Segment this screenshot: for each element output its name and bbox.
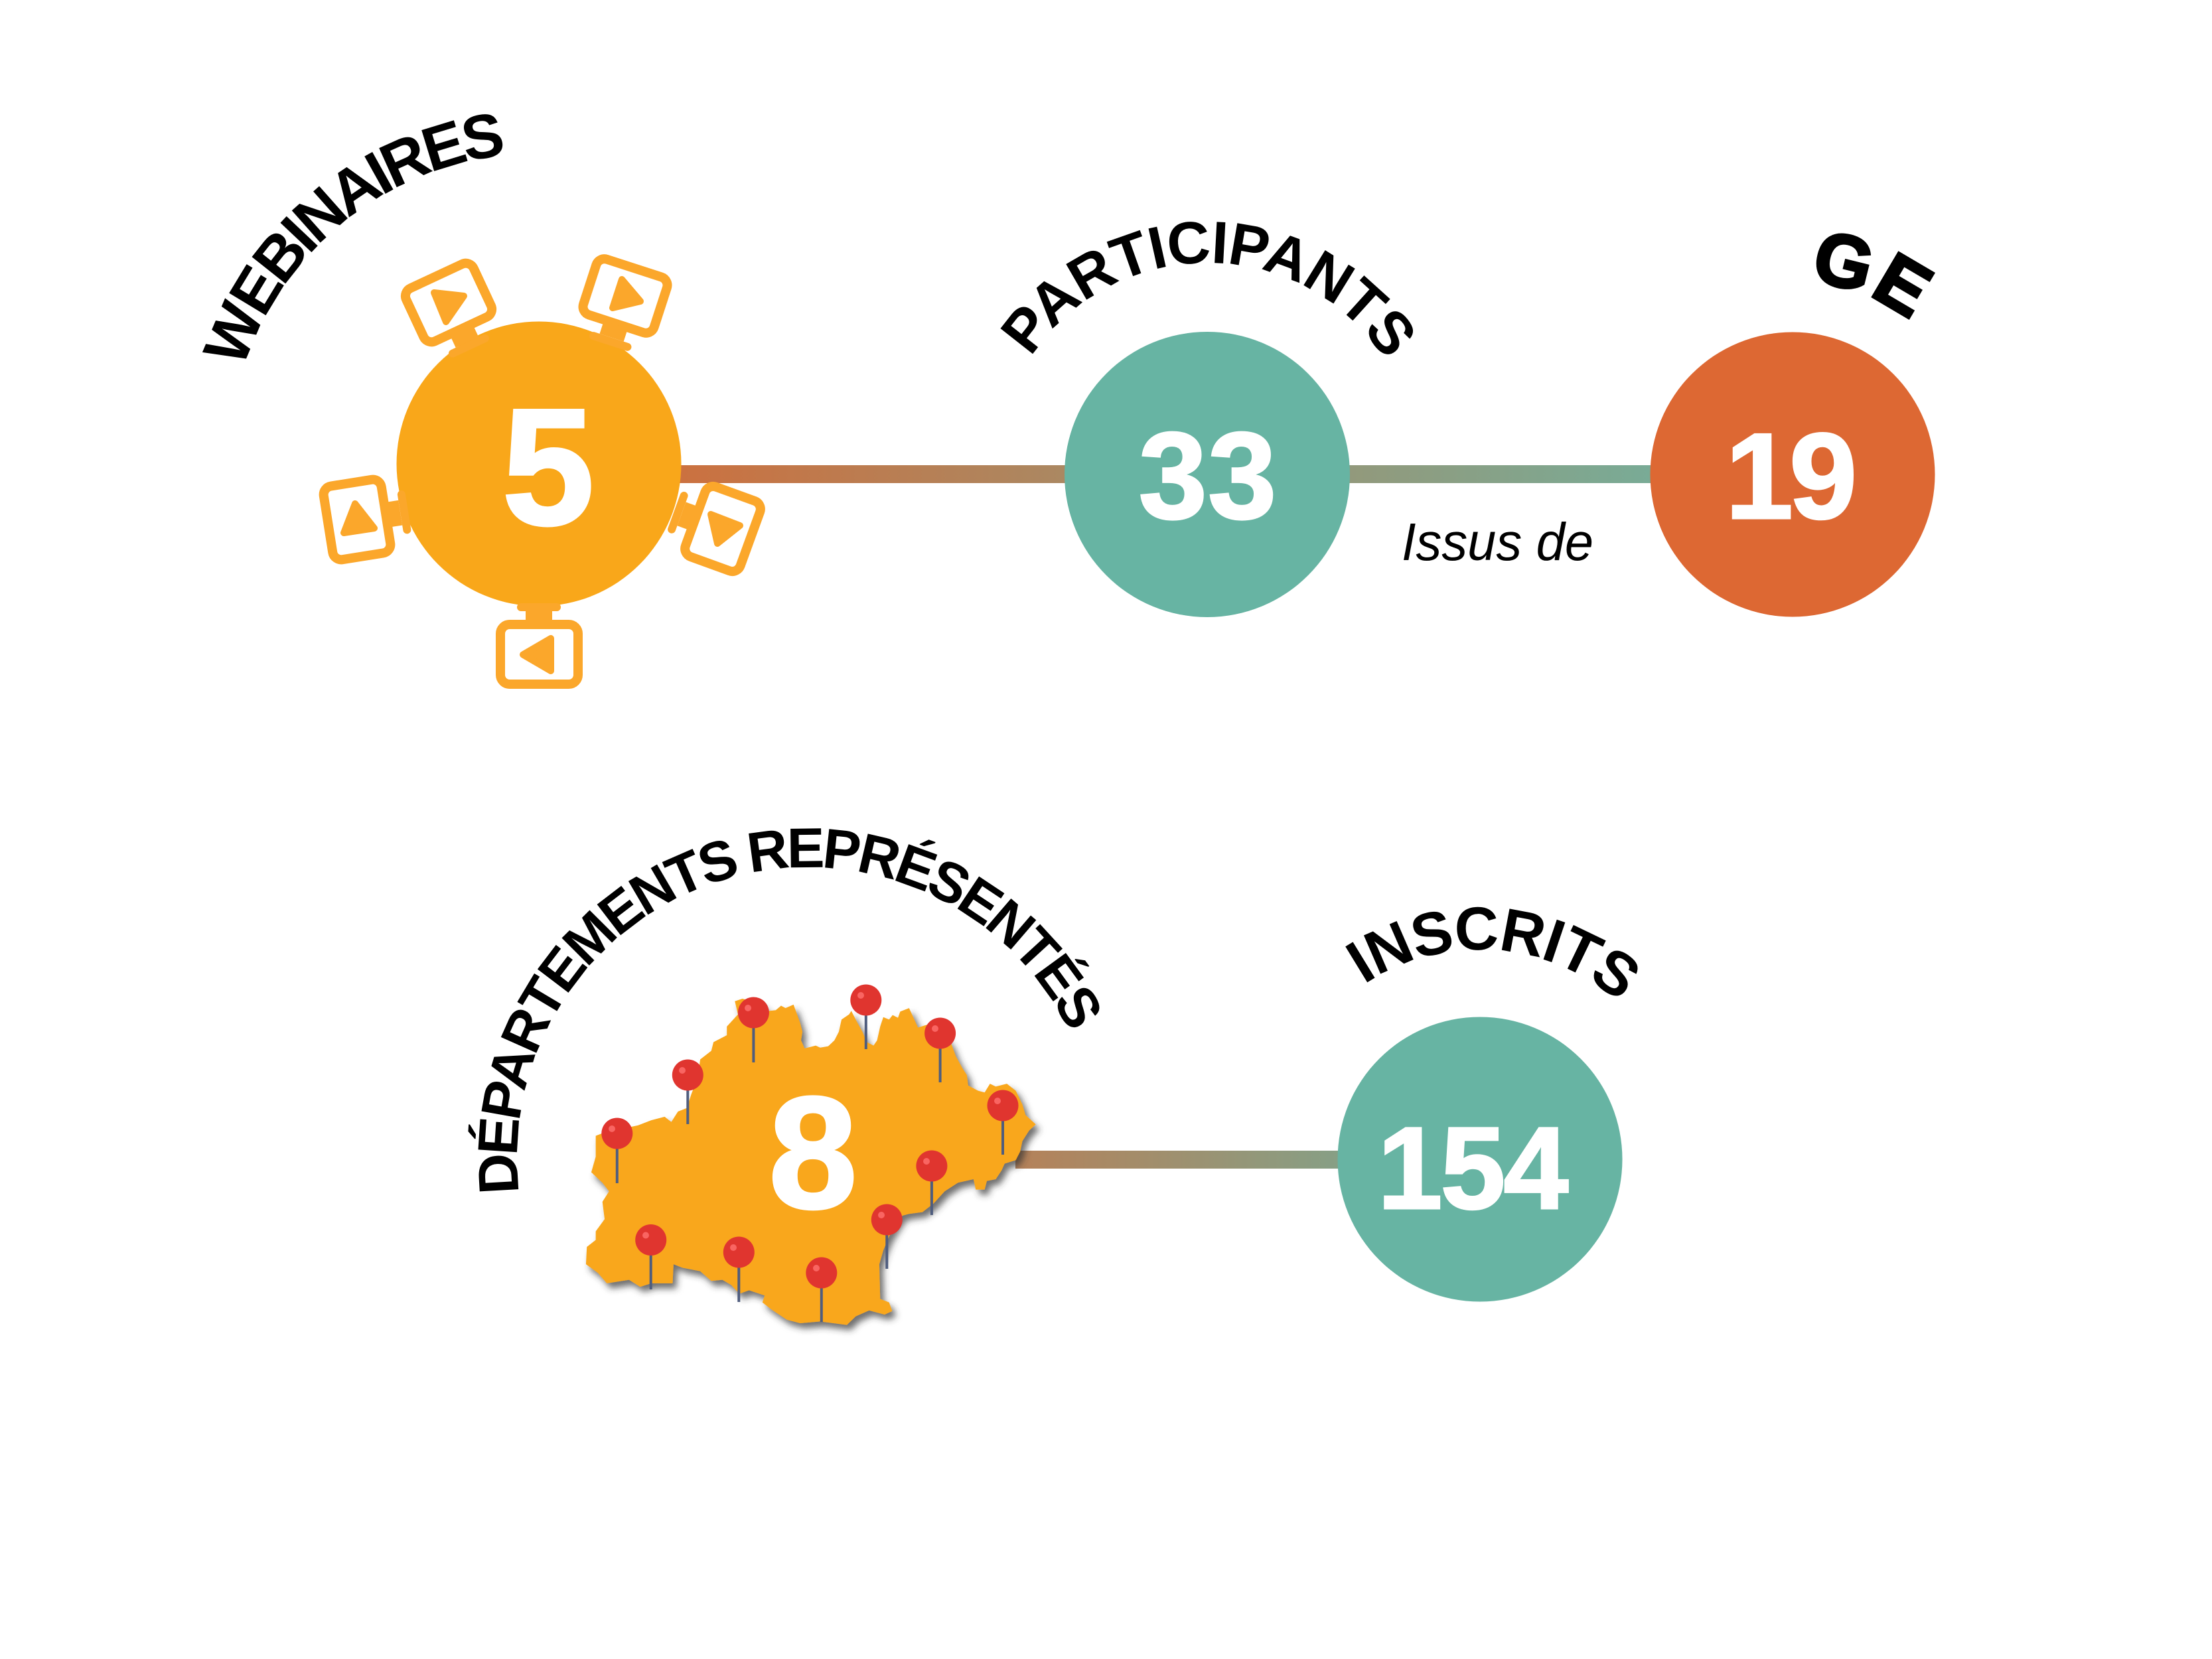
connector: participants to GE [1347,465,1653,483]
pin 1 [601,1118,632,1183]
pin 2 [672,1059,703,1124]
panel: GE circle [1650,332,1935,617]
connector: webinaires to participants [677,465,1069,483]
map: Occitanie region [586,999,1036,1325]
number: 154: 154 [1378,1104,1568,1234]
heading: GE: GE [1816,234,1935,320]
pin 9 [806,1257,837,1322]
icon: video screen bottom [500,603,578,684]
pin 4 [850,985,881,1049]
number: 19: 19 [1726,407,1853,544]
heading: WEBINAIRES: WEBINAIRES [202,114,503,358]
pin 11 [635,1224,666,1289]
pin 10 [723,1237,755,1302]
pin 5 [924,1018,956,1082]
connector: map to inscrits [1015,1151,1341,1169]
pin 6 [988,1090,1018,1155]
icon: video screen top left [403,260,504,365]
number: 8: 8 [769,1064,857,1242]
label: Issus de: Issus de [1402,512,1593,571]
number: 5: 5 [502,374,595,559]
icon: video screen right [662,476,763,574]
pin 7 [916,1151,947,1215]
panel: webinaires circle [397,321,681,607]
heading: DÉPARTEMENTS REPRÉSENTÉS: DÉPARTEMENTS REPRÉSENTÉS [468,828,1099,1192]
pin 8 [871,1204,903,1269]
heading: INSCRITS: INSCRITS [1345,906,1638,995]
panel: inscrits circle [1338,1017,1622,1302]
number: 33: 33 [1139,407,1277,545]
panel: participants circle [1065,332,1350,617]
pin 3 [738,997,769,1062]
icon: video screen left [323,474,414,561]
icon: video screen top right [574,257,670,356]
heading: PARTICIPANTS: PARTICIPANTS [1001,222,1413,354]
